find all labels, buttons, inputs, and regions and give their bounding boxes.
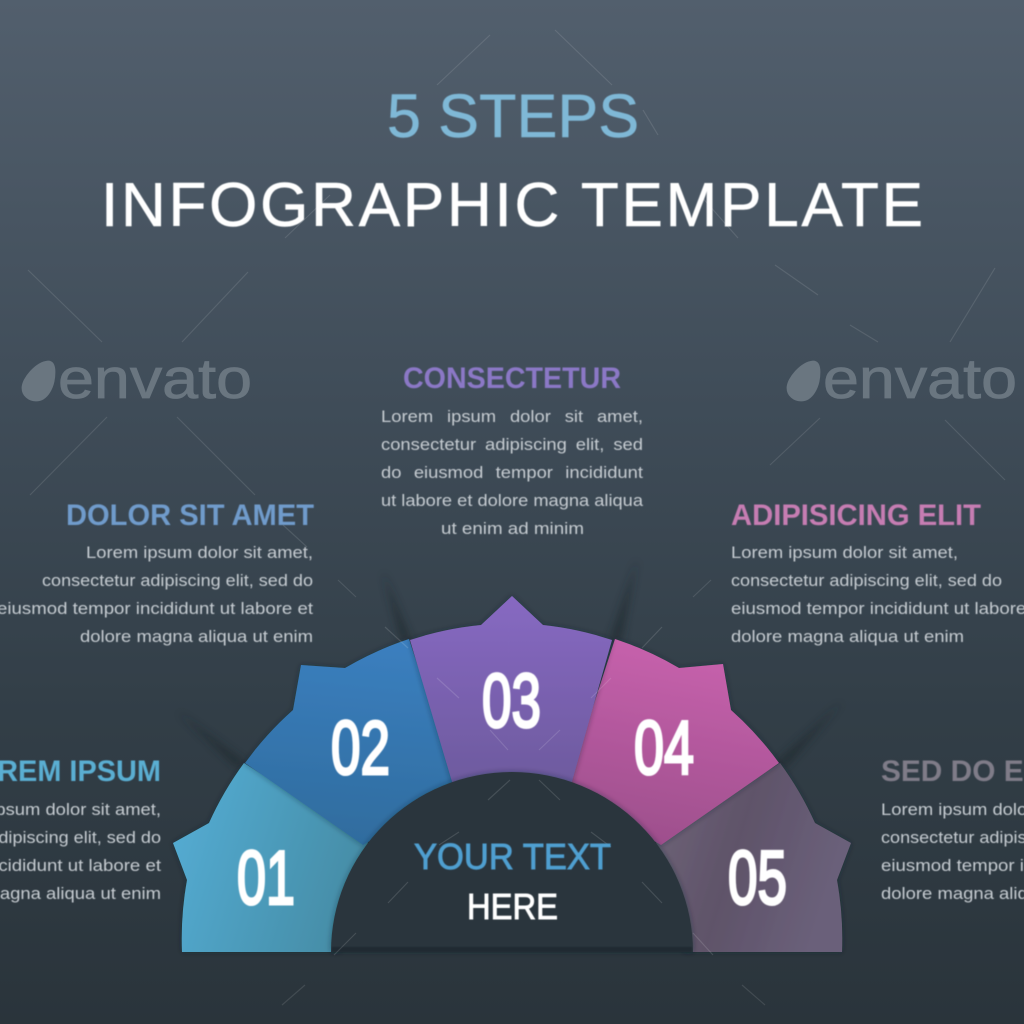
text block: adipisicing elit: dolore magna aliqua ut enim — [731, 628, 964, 646]
envato watermark left: envato — [58, 347, 252, 411]
text block: adipisicing elit: ADIPISICING ELIT — [731, 499, 981, 532]
center semicircle — [331, 772, 693, 952]
center label: HERE — [467, 886, 558, 927]
text block: dolor sit amet: DOLOR SIT AMET — [66, 499, 314, 532]
envato watermark right: envato — [823, 347, 1017, 411]
segment shadows — [178, 560, 842, 768]
text block: consectetur: do eiusmod tempor incididunt — [381, 464, 643, 482]
step numbers — [237, 659, 787, 921]
center label: YOUR TEXT — [414, 836, 611, 877]
text block: adipisicing elit: eiusmod tempor incididunt ut labore et — [731, 600, 1024, 618]
segment 05 — [656, 763, 851, 952]
segment 04 — [566, 639, 779, 845]
segment 01 — [173, 763, 368, 952]
text block: consectetur: CONSECTETUR — [403, 362, 621, 395]
chart overlay lines — [334, 627, 713, 955]
segment 02 — [245, 639, 458, 845]
text block: dolor sit amet: Lorem ipsum dolor sit amet, — [86, 544, 313, 562]
text block: lorem ipsum — [0, 755, 161, 903]
step numbers: 04 — [634, 706, 694, 791]
title — [101, 82, 923, 240]
text block: dolor sit amet: consectetur adipiscing elit, sed do — [42, 572, 313, 590]
title: 5 STEPS — [387, 82, 639, 150]
text block: consectetur: Lorem ipsum dolor sit amet, — [381, 408, 643, 426]
step numbers: 03 — [482, 659, 541, 744]
text block: adipisicing elit: Lorem ipsum dolor sit amet, — [731, 544, 958, 562]
step numbers: 05 — [728, 836, 787, 921]
text block: dolor sit amet: eiusmod tempor incididunt ut labore et — [0, 600, 313, 618]
text block: adipisicing elit — [731, 499, 1024, 646]
center label — [414, 836, 611, 927]
step numbers: 02 — [331, 706, 390, 791]
text block: consectetur: ut labore et dolore magna aliqua — [381, 492, 644, 510]
text block: adipisicing elit: consectetur adipiscing elit, sed do — [731, 572, 1002, 590]
segment 03 — [410, 596, 612, 785]
text block: consectetur: ut enim ad minim — [441, 520, 584, 538]
chart base shadow — [332, 947, 692, 952]
title: INFOGRAPHIC TEMPLATE — [101, 171, 923, 240]
text block: sed do eiusmod — [881, 755, 1024, 903]
text block: consectetur — [381, 362, 644, 538]
text block: consectetur: consectetur adipiscing elit, sed — [381, 436, 643, 454]
step numbers: 01 — [237, 836, 295, 921]
text block: dolor sit amet: dolore magna aliqua ut enim — [80, 628, 313, 646]
text block: dolor sit amet — [0, 499, 314, 646]
semicircle chart — [173, 596, 851, 952]
